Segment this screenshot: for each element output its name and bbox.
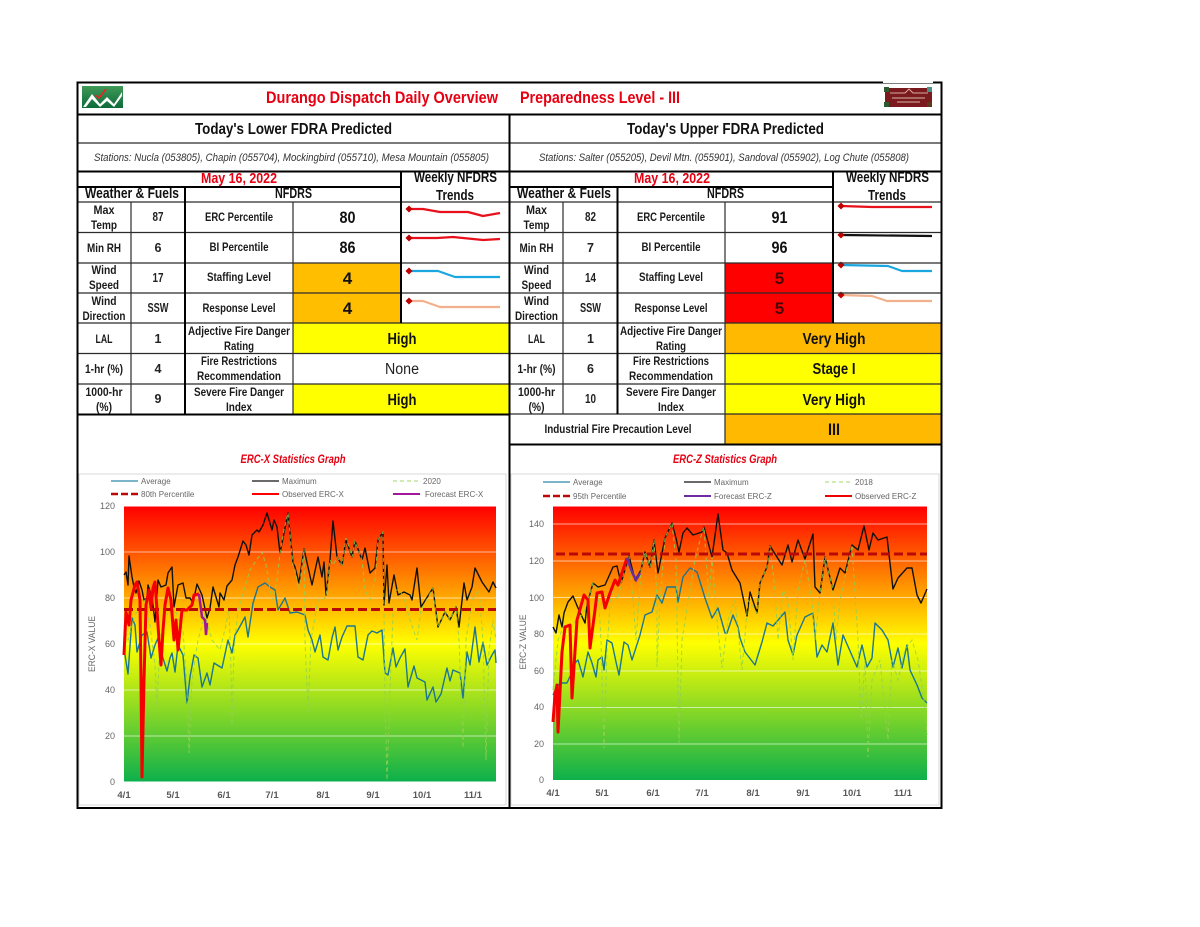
value fills upper: [725, 263, 941, 444]
row: min RH and BI: 6: [155, 241, 162, 255]
heading: weather and fuels: Weather & Fuels: [85, 186, 179, 202]
row: 1000-hr and severe index: High: [388, 392, 416, 409]
line: forecast ERC-Z: [627, 558, 640, 580]
date: upper: May 16, 2022: [634, 171, 710, 187]
row: min RH and BI: 86: [340, 238, 356, 257]
sparkline: lower staffing trend: [405, 267, 500, 277]
row: 1000-hr and severe index upper: Very High: [802, 392, 866, 409]
row: wind direction and response: SSW: [148, 301, 169, 315]
row: wind direction and response upper: Wind: [524, 294, 549, 308]
row: wind speed and staffing upper: Wind: [524, 263, 549, 277]
panel: upper FDRA table: [515, 121, 941, 444]
heading: weather and fuels upper: Weather & Fuels: [517, 186, 611, 202]
row: industrial fire precaution level: III: [828, 420, 840, 439]
plot: gradient background: [553, 506, 927, 780]
heading: weekly trends: Trends: [436, 188, 474, 204]
line: average ERC-Z: [553, 568, 927, 703]
row: min RH and BI upper: BI Percentile: [642, 240, 701, 254]
row: 1000-hr and severe index: 1000-hr: [86, 385, 123, 399]
icon: left agency logo: [82, 86, 123, 108]
row: wind speed and staffing upper: 5: [775, 269, 784, 288]
table rules: [78, 114, 941, 444]
icon: right agency badge: [884, 87, 932, 107]
row: max temp and ERC upper: [524, 203, 788, 232]
row: 1000-hr and severe index: Index: [226, 400, 252, 414]
row: max temp and ERC: Temp: [91, 218, 117, 232]
sparkline: lower BI trend: [405, 234, 500, 242]
row: 1-hr and restrictions: [85, 354, 419, 383]
row: LAL and adjective rating: LAL: [96, 332, 112, 346]
row: 1000-hr and severe index upper: 10: [585, 392, 596, 406]
row: 1000-hr and severe index upper: 1000-hr: [518, 385, 555, 399]
legend: ERC-Z: Average: [573, 478, 603, 487]
gridlines and axes: 60: [534, 666, 544, 676]
legend: ERC-Z: Observed ERC-Z: [855, 492, 916, 501]
legend: ERC-X: 2020: [423, 477, 441, 486]
line: observed ERC-Z: [553, 558, 627, 732]
row: 1-hr and restrictions upper: Recommendation: [629, 369, 713, 383]
legend: ERC-Z: Maximum: [714, 478, 749, 487]
stations: upper: Stations: Salter (055205), Devil Mtn. (055901), Sandoval (055902), Log Chute (055808): [539, 152, 909, 164]
sparkline: upper ERC trend: [837, 202, 932, 210]
gridlines and axes: 80: [105, 593, 115, 603]
gridlines and axes: 9/1: [366, 790, 380, 801]
row: wind speed and staffing: [89, 263, 353, 292]
chart: ERC-Z statistics: [511, 454, 939, 805]
row: max temp and ERC: ERC Percentile: [205, 210, 273, 224]
gridlines and axes: 7/1: [265, 790, 279, 801]
row: max temp and ERC: 87: [152, 210, 164, 224]
legend: ERC-Z: 2018: [855, 478, 873, 487]
row: 1-hr and restrictions: Fire Restrictions: [201, 354, 277, 368]
row: LAL and adjective rating: Rating: [224, 339, 254, 353]
gridlines and axes: 6/1: [217, 790, 231, 801]
gridlines and axes: 100: [529, 593, 544, 603]
gridlines and axes: 10/1: [843, 788, 862, 799]
legend: ERC-X: Maximum: [282, 477, 317, 486]
row: wind speed and staffing upper: 14: [585, 271, 596, 285]
row: industrial fire precaution level: [544, 420, 840, 439]
row: LAL and adjective rating upper: 1: [587, 332, 594, 346]
row: wind direction and response upper: Direction: [515, 309, 558, 323]
gridlines and axes: 0: [539, 775, 544, 785]
plot: gradient background: [124, 506, 496, 782]
heading: weekly trends upper: Weekly NFDRS: [846, 170, 929, 186]
legend: ERC-X: 80th Percentile: [141, 490, 195, 499]
gridlines and axes: 40: [534, 702, 544, 712]
legend: ERC-X: [111, 477, 484, 499]
gridlines and axes: 120: [100, 501, 115, 511]
row: 1000-hr and severe index: (%): [96, 400, 112, 414]
gridlines and axes: 8/1: [746, 788, 760, 799]
gridlines and axes: 11/1: [464, 790, 483, 801]
row: max temp and ERC upper: Max: [526, 203, 547, 217]
row: LAL and adjective rating upper: Rating: [656, 339, 686, 353]
row: min RH and BI upper: 7: [587, 241, 594, 255]
sparkline: upper response trend: [837, 291, 932, 301]
legend: ERC-Z: [543, 478, 916, 501]
row: max temp and ERC upper: Temp: [524, 218, 550, 232]
row: wind speed and staffing: Staffing Level: [207, 270, 271, 284]
panel: lower FDRA table: [82, 121, 509, 414]
row: min RH and BI upper: Min RH: [520, 241, 554, 255]
row: LAL and adjective rating: High: [388, 331, 416, 348]
heading: weekly trends: Weekly NFDRS: [414, 170, 497, 186]
row: 1-hr and restrictions: Recommendation: [197, 369, 281, 383]
row: max temp and ERC upper: 91: [772, 208, 788, 227]
row: 1-hr and restrictions upper: 6: [587, 362, 594, 376]
gridlines and axes: 4/1: [546, 788, 560, 799]
sparkline: upper staffing trend: [837, 261, 932, 271]
row: 1000-hr and severe index: 9: [155, 392, 162, 406]
gridlines and axes: 5/1: [595, 788, 609, 799]
row: max temp and ERC: [91, 203, 356, 232]
sparkline: upper BI trend: [837, 231, 932, 239]
outer frame: [78, 81, 942, 808]
preparedness level: Preparedness Level - III: [520, 88, 680, 107]
row: max temp and ERC: 80: [340, 208, 356, 227]
heading: upper FDRA: Today's Upper FDRA Predicted: [627, 121, 824, 138]
row: 1000-hr and severe index: [86, 385, 416, 414]
row: wind speed and staffing: 17: [152, 271, 164, 285]
row: 1-hr and restrictions: 1-hr (%): [85, 362, 123, 376]
row: wind speed and staffing upper: Staffing Level: [639, 270, 703, 284]
gridlines and axes: [87, 501, 496, 801]
line: maximum ERC-Z: [553, 514, 927, 633]
row: min RH and BI upper: [520, 238, 788, 257]
line: maximum ERC-X: [124, 513, 496, 627]
legend: ERC-X: Forecast ERC-X: [425, 490, 484, 499]
gridlines and axes: 9/1: [796, 788, 810, 799]
row: 1000-hr and severe index upper: Index: [658, 400, 684, 414]
row: wind speed and staffing upper: [522, 263, 784, 292]
heading: weekly trends: [414, 170, 497, 204]
row: wind direction and response: [82, 294, 353, 323]
gridlines and axes: 40: [105, 685, 115, 695]
row: industrial fire precaution level: Industrial Fire Precaution Level: [544, 422, 692, 436]
heading: NFDRS: NFDRS: [275, 186, 312, 202]
row: 1-hr and restrictions upper: [518, 354, 856, 383]
row: wind speed and staffing: Speed: [89, 278, 119, 292]
heading: NFDRS upper: NFDRS: [707, 186, 744, 202]
gridlines and axes: 4/1: [117, 790, 131, 801]
legend: ERC-Z: 95th Percentile: [573, 492, 627, 501]
row: min RH and BI upper: 96: [772, 238, 788, 257]
row: wind speed and staffing: 4: [343, 269, 353, 288]
row: wind speed and staffing: Wind: [92, 263, 116, 277]
line: observed ERC-X: [124, 582, 199, 777]
line: average ERC-X: [125, 583, 496, 703]
row: wind direction and response: Response Level: [202, 301, 276, 315]
row: 1000-hr and severe index upper: [518, 385, 866, 414]
gridlines and axes: ERC-X VALUE: [87, 616, 98, 672]
row: 1-hr and restrictions upper: Stage I: [812, 361, 856, 378]
gridlines and axes: 100: [100, 547, 115, 557]
row: min RH and BI: Min RH: [87, 241, 121, 255]
line: 80th percentile: [124, 608, 496, 611]
line: 2018 ERC-Z: [553, 523, 927, 757]
gridlines and axes: [518, 519, 927, 799]
gridlines and axes: ERC-Z VALUE: [518, 614, 529, 670]
row: LAL and adjective rating: [96, 324, 416, 353]
gridlines and axes: 11/1: [894, 788, 913, 799]
line: 2020 ERC-X: [124, 513, 496, 780]
gridlines and axes: 10/1: [413, 790, 432, 801]
legend: ERC-X: Average: [141, 477, 171, 486]
title: Durango Dispatch Daily Overview: [266, 88, 499, 107]
row: 1-hr and restrictions upper: 1-hr (%): [518, 362, 556, 376]
gridlines and axes: 8/1: [316, 790, 330, 801]
row: 1000-hr and severe index upper: (%): [528, 400, 544, 414]
gridlines and axes: 20: [534, 739, 544, 749]
gridlines and axes: 5/1: [166, 790, 180, 801]
gridlines and axes: 60: [105, 639, 115, 649]
row: LAL and adjective rating upper: [528, 324, 866, 353]
row: LAL and adjective rating: 1: [155, 332, 162, 346]
row: 1000-hr and severe index: Severe Fire Danger: [194, 385, 284, 399]
row: LAL and adjective rating upper: Very High: [802, 331, 866, 348]
row: max temp and ERC: Max: [94, 203, 115, 217]
row: wind direction and response upper: [515, 294, 784, 323]
heading: weekly trends upper: Trends: [868, 188, 906, 204]
gridlines and axes: 120: [529, 556, 544, 566]
row: 1000-hr and severe index upper: Severe Fire Danger: [626, 385, 716, 399]
gridlines and axes: 6/1: [646, 788, 660, 799]
chart: ERC-X statistics: [79, 454, 506, 805]
legend: ERC-X: Observed ERC-X: [282, 490, 344, 499]
line: 95th percentile: [556, 552, 927, 556]
row: max temp and ERC upper: 82: [585, 210, 596, 224]
row: LAL and adjective rating upper: LAL: [528, 332, 545, 346]
header bar: [82, 86, 932, 108]
row: LAL and adjective rating: Adjective Fire Danger: [188, 324, 290, 338]
row: wind direction and response upper: Response Level: [634, 301, 708, 315]
legend: ERC-Z: Forecast ERC-Z: [714, 492, 772, 501]
row: wind direction and response: Direction: [82, 309, 126, 323]
gridlines and axes: 140: [529, 519, 544, 529]
chart title: ERC-X: ERC-X Statistics Graph: [240, 454, 346, 466]
gridlines and axes: 80: [534, 629, 544, 639]
date: lower: May 16, 2022: [201, 171, 277, 187]
gridlines and axes: 0: [110, 777, 115, 787]
row: min RH and BI: [87, 238, 356, 257]
sparkline: lower response trend: [405, 297, 500, 307]
row: min RH and BI: BI Percentile: [210, 240, 269, 254]
sparkline: lower ERC trend: [405, 205, 500, 216]
gridlines and axes: 20: [105, 731, 115, 741]
row: 1-hr and restrictions: 4: [155, 362, 162, 376]
chart title: ERC-Z: ERC-Z Statistics Graph: [673, 454, 777, 466]
gridlines and axes: 7/1: [695, 788, 709, 799]
row: wind speed and staffing upper: Speed: [522, 278, 552, 292]
row: 1-hr and restrictions upper: Fire Restrictions: [633, 354, 709, 368]
row: wind direction and response upper: SSW: [580, 301, 601, 315]
row: wind direction and response upper: 5: [775, 299, 784, 318]
row: wind direction and response: 4: [343, 299, 353, 318]
row: max temp and ERC upper: ERC Percentile: [637, 210, 705, 224]
heading: lower FDRA: Today's Lower FDRA Predicted: [195, 121, 392, 138]
row: LAL and adjective rating upper: Adjective Fire Danger: [620, 324, 722, 338]
heading: weekly trends upper: [846, 170, 929, 204]
row: 1-hr and restrictions: None: [385, 361, 419, 378]
row: wind direction and response: Wind: [92, 294, 116, 308]
stations: lower: Stations: Nucla (053805), Chapin (055704), Mockingbird (055710), Mesa Mountain (055805): [94, 152, 489, 164]
value fills: [293, 263, 509, 414]
line: forecast ERC-X: [199, 594, 207, 635]
